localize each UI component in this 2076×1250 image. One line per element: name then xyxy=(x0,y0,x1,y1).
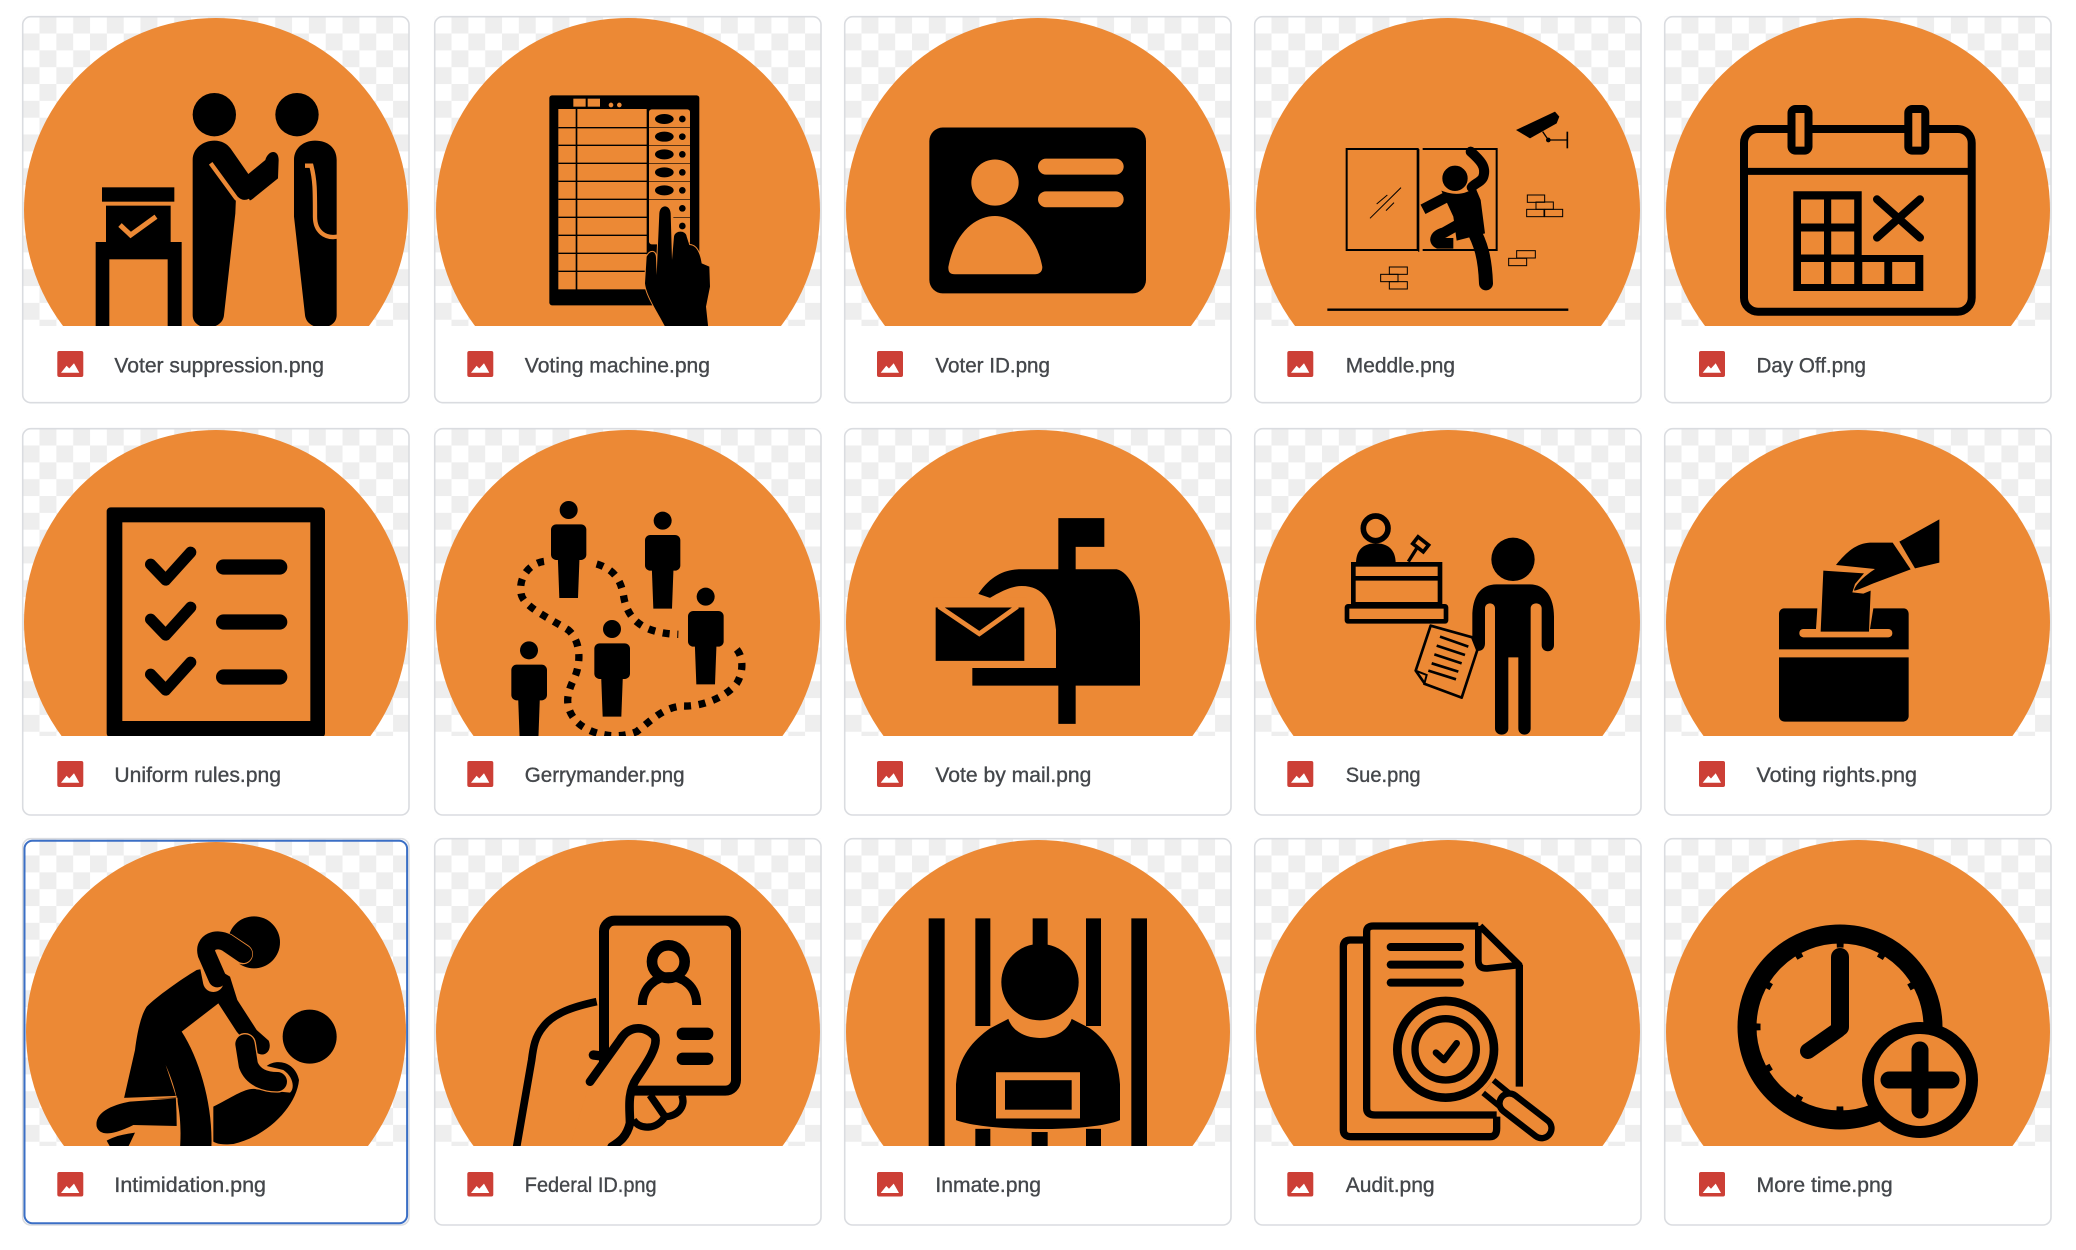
card: Meddle xyxy=(1255,17,1641,403)
icon: image file xyxy=(57,1172,83,1196)
label strip xyxy=(845,326,1231,402)
icon: image file xyxy=(1699,761,1725,787)
icon: checklist xyxy=(107,507,325,737)
orange circle xyxy=(1256,430,1640,814)
transparency checker xyxy=(1255,839,1641,1146)
card border xyxy=(435,17,821,403)
label strip xyxy=(1255,326,1641,402)
file name: Intimidation.png xyxy=(114,1174,266,1197)
orange circle xyxy=(846,840,1230,1224)
icon: image file xyxy=(877,1172,903,1196)
icon: calendar with cross xyxy=(1744,109,1972,312)
file name: Audit.png xyxy=(1346,1174,1435,1197)
transparency checker xyxy=(845,839,1231,1146)
card border xyxy=(23,839,409,1225)
icon: image file xyxy=(467,1172,493,1196)
orange circle xyxy=(1666,840,2050,1224)
orange circle xyxy=(1666,430,2050,814)
icon: inmate behind bars xyxy=(929,918,1147,1158)
card border xyxy=(23,17,409,403)
transparency checker xyxy=(845,17,1231,326)
file name: Voter ID.png xyxy=(935,354,1050,377)
transparency checker xyxy=(845,429,1231,736)
icon: image file xyxy=(1699,1172,1725,1196)
transparency checker xyxy=(1255,17,1641,326)
transparency checker xyxy=(23,839,409,1146)
card: Gerrymander xyxy=(435,429,821,815)
icon: image file xyxy=(57,761,83,787)
card border xyxy=(845,429,1231,815)
icon: image file xyxy=(1287,1172,1313,1196)
transparency checker xyxy=(435,839,821,1146)
file name: Voting rights.png xyxy=(1756,764,1917,787)
card border xyxy=(1665,429,2051,815)
icon: document and magnifier xyxy=(1343,926,1542,1137)
transparency checker xyxy=(1665,839,2051,1146)
card: More time xyxy=(1665,839,2051,1225)
icon: voter and ballot box xyxy=(96,93,337,333)
icon: image file xyxy=(1287,351,1313,377)
transparency checker xyxy=(1255,429,1641,736)
icon: ID card xyxy=(929,128,1146,293)
card: Audit xyxy=(1255,839,1641,1225)
file name: Inmate.png xyxy=(935,1174,1041,1197)
transparency checker xyxy=(1665,429,2051,736)
orange circle xyxy=(24,18,408,402)
icon: mailbox and envelope xyxy=(933,518,1140,724)
orange circle xyxy=(1256,18,1640,402)
card: Uniform rules xyxy=(23,429,409,815)
file name: Uniform rules.png xyxy=(114,764,281,787)
orange circle xyxy=(436,430,820,814)
label strip xyxy=(23,736,409,815)
transparency checker xyxy=(23,17,409,326)
label strip xyxy=(435,736,821,815)
icon: image file xyxy=(877,761,903,787)
card: Voting rights xyxy=(1665,429,2051,815)
label strip xyxy=(1255,736,1641,815)
icon: people and district boundary xyxy=(511,501,742,740)
icon: judge and plaintiff xyxy=(1347,516,1554,735)
icon: image file xyxy=(1287,761,1313,787)
icon: hand holding ID xyxy=(517,921,736,1147)
card border xyxy=(1255,429,1641,815)
card border xyxy=(1255,17,1641,403)
icon: image file xyxy=(1699,351,1725,377)
orange circle xyxy=(1666,18,2050,402)
transparency checker xyxy=(435,17,821,326)
file name: Day Off.png xyxy=(1756,354,1866,377)
file name: Federal ID.png xyxy=(525,1174,657,1197)
icon: hand casting ballot xyxy=(1779,519,1939,722)
transparency checker xyxy=(435,429,821,736)
orange circle xyxy=(26,842,406,1222)
orange circle xyxy=(436,840,820,1224)
card border xyxy=(845,839,1231,1225)
card: Voter suppression xyxy=(23,17,409,403)
transparency checker xyxy=(23,429,409,736)
label strip xyxy=(845,1146,1231,1225)
card: Inmate xyxy=(845,839,1231,1225)
card: Sue xyxy=(1255,429,1641,815)
card border xyxy=(1665,839,2051,1225)
orange circle xyxy=(436,18,820,402)
card border xyxy=(435,839,821,1225)
icon: image file xyxy=(57,351,83,377)
orange circle xyxy=(1256,840,1640,1224)
label strip xyxy=(1665,1146,2051,1225)
card: Intimidation (selected) xyxy=(23,839,409,1225)
file name: Meddle.png xyxy=(1346,354,1455,377)
card border xyxy=(1255,839,1641,1225)
label strip xyxy=(1255,1146,1641,1225)
file name: Sue.png xyxy=(1346,764,1421,787)
selected outline xyxy=(24,841,407,1223)
icon: image file xyxy=(467,351,493,377)
card: Vote by mail xyxy=(845,429,1231,815)
card border xyxy=(845,17,1231,403)
orange circle xyxy=(24,430,408,814)
label strip xyxy=(845,736,1231,815)
orange circle xyxy=(846,430,1230,814)
card border xyxy=(435,429,821,815)
card border xyxy=(23,429,409,815)
transparency checker xyxy=(1665,17,2051,326)
label strip xyxy=(435,1146,821,1225)
icon: image file xyxy=(877,351,903,377)
icon: voting machine and hand xyxy=(549,95,710,328)
file name: More time.png xyxy=(1756,1174,1893,1197)
card: Voter ID xyxy=(845,17,1231,403)
icon: image file xyxy=(467,761,493,787)
icon: clock with plus xyxy=(1747,934,1972,1132)
card: Voting machine xyxy=(435,17,821,403)
card border xyxy=(1665,17,2051,403)
card: Day Off xyxy=(1665,17,2051,403)
label strip xyxy=(23,326,409,402)
label strip xyxy=(435,326,821,402)
file name: Vote by mail.png xyxy=(935,764,1091,787)
icon: intruder at window xyxy=(1327,112,1568,310)
icon: one figure attacking another xyxy=(96,916,337,1148)
file name: Voter suppression.png xyxy=(114,354,324,377)
label strip xyxy=(23,1146,409,1225)
label strip xyxy=(1665,326,2051,402)
file name: Gerrymander.png xyxy=(525,764,685,787)
card: Federal ID xyxy=(435,839,821,1225)
label strip xyxy=(1665,736,2051,815)
file name: Voting machine.png xyxy=(525,354,710,377)
orange circle xyxy=(846,18,1230,402)
